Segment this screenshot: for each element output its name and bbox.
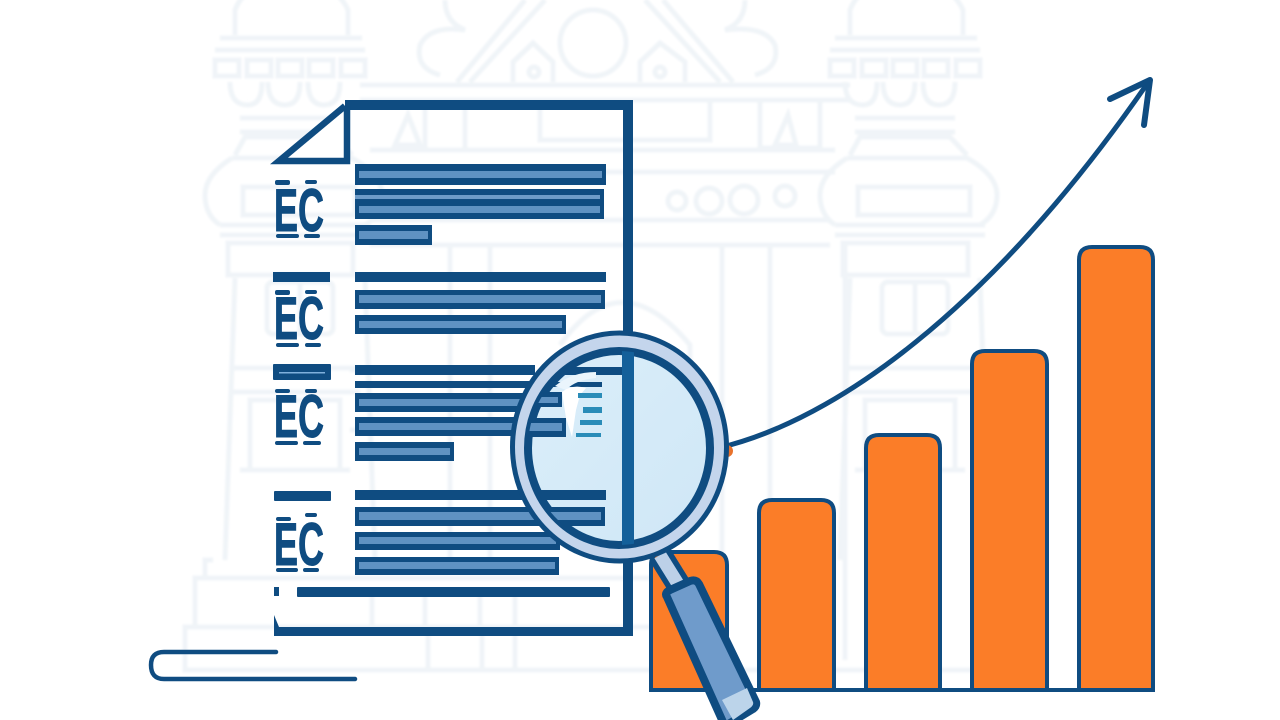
bar chart (650, 247, 1155, 690)
section 4 text lines (355, 490, 606, 575)
section 3 text lines (355, 365, 535, 461)
handle neck (660, 555, 688, 600)
bar 4 (972, 351, 1047, 690)
watermark: temple building (185, 0, 1000, 670)
handle grip (666, 580, 756, 720)
bar 1 (651, 552, 727, 690)
section 3 EC label (273, 364, 331, 450)
book outline bottom left (151, 652, 355, 679)
watermark: columns and arch (185, 245, 1000, 670)
section 1 text lines (355, 164, 606, 245)
watermark: left tower (205, 0, 382, 560)
lens rim (512, 333, 726, 561)
growth arrow (730, 80, 1150, 445)
magnified content (530, 351, 634, 545)
magnifying glass (512, 333, 756, 720)
watermark: entablature (360, 85, 850, 245)
chart baseline (650, 688, 1155, 692)
orange contact dot (721, 445, 733, 457)
lens glass (528, 351, 710, 545)
bar 2 (759, 500, 834, 690)
bar 3 (866, 435, 940, 690)
document (273, 100, 633, 636)
section 1 EC label: EC (274, 177, 324, 244)
section 2 EC label (273, 272, 330, 352)
section 4 EC label: EC (274, 511, 324, 578)
watermark: right tower (820, 0, 997, 560)
section 2 EC label: EC (274, 285, 324, 352)
document corner fold (279, 106, 347, 161)
bar 5 (1079, 247, 1153, 690)
section 4 EC label (274, 491, 331, 578)
section 1 EC label (274, 177, 324, 244)
section 3 EC label: EC (274, 383, 324, 450)
watermark: gable roof (419, 0, 776, 82)
document page outline (274, 100, 633, 636)
closing text line (274, 587, 610, 597)
section 2 text lines (355, 272, 606, 334)
